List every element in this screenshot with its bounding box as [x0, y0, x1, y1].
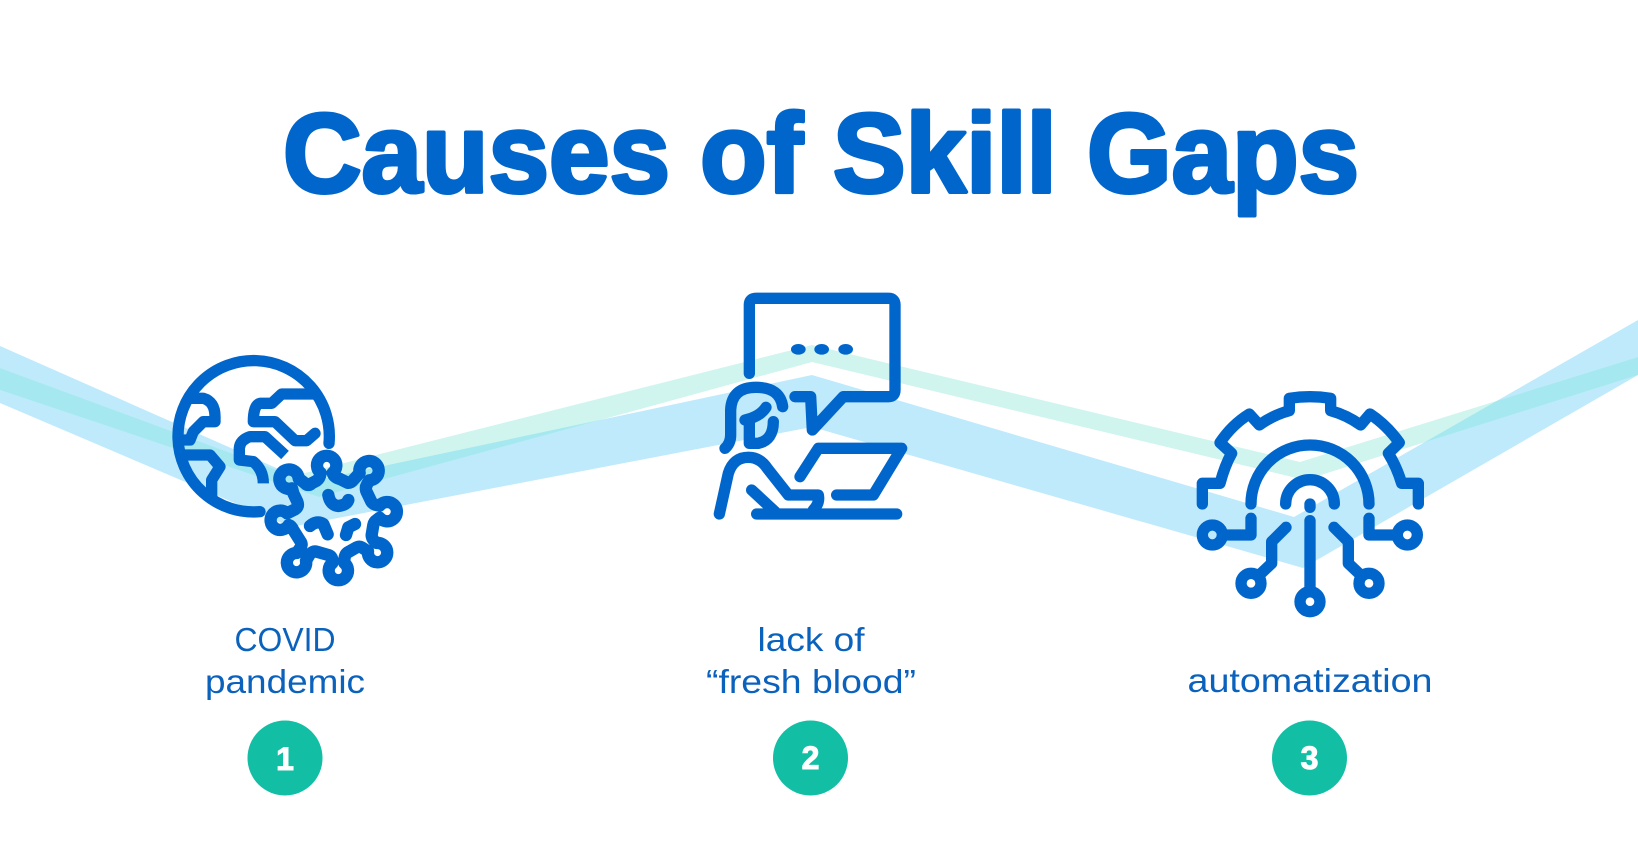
- label: COVID pandemic: [205, 621, 365, 700]
- virus: [271, 456, 397, 580]
- label: lack of fresh blood: [706, 621, 916, 700]
- number badge 3: [1272, 720, 1347, 796]
- icon: person at laptop with speech bubble: [719, 298, 902, 514]
- number badge 2: [773, 720, 848, 796]
- number badge 3: 3: [1301, 740, 1318, 776]
- title: Causes of Skill Gaps: [283, 91, 1359, 216]
- number badge 1: [248, 720, 322, 796]
- icon: gear with circuit: [1202, 397, 1418, 612]
- icon: globe with virus: [178, 361, 397, 580]
- label: lack of fresh blood: “fresh blood”: [706, 663, 916, 700]
- number badge 2: 2: [802, 740, 819, 776]
- label: COVID pandemic: pandemic: [205, 663, 365, 700]
- label: automatization: automatization: [1188, 662, 1432, 699]
- label: COVID pandemic: COVID: [234, 621, 336, 658]
- background ribbons: [0, 320, 1638, 568]
- ribbon: overlap: [0, 345, 1638, 497]
- ribbon: blue band: [0, 320, 1638, 568]
- ribbon: mint band: [0, 345, 1638, 497]
- label: lack of fresh blood: lack of: [758, 621, 865, 658]
- number badge 1: 1: [276, 741, 294, 777]
- globe: [178, 361, 329, 512]
